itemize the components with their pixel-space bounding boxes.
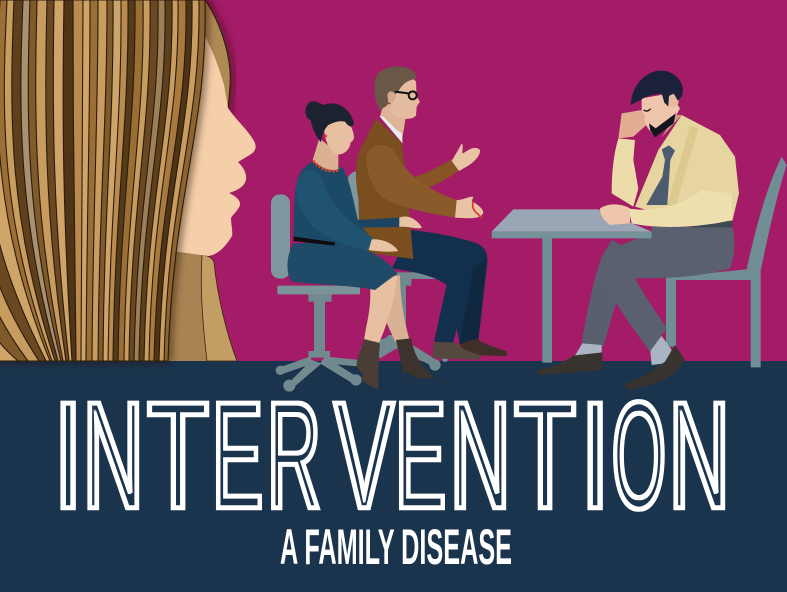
title: T — [514, 371, 576, 541]
neck hair — [160, 245, 237, 361]
man's trousers — [392, 230, 487, 344]
shirt torso — [635, 115, 739, 223]
title: O — [612, 371, 666, 541]
woman's neck and head — [305, 101, 354, 171]
table — [492, 209, 652, 363]
woman's torso — [293, 162, 373, 245]
shirt shading — [668, 125, 698, 207]
man's far leg shade — [459, 258, 487, 344]
title: T — [147, 371, 209, 541]
belt — [693, 221, 732, 227]
wooden chair — [666, 157, 787, 367]
woman and man seated on the left — [271, 66, 507, 392]
man's office chair — [346, 171, 448, 371]
raised arm — [612, 138, 638, 207]
title: R — [267, 372, 321, 541]
title: I — [53, 370, 83, 540]
near shoe — [624, 345, 685, 389]
man's far arm — [407, 159, 459, 195]
woman's near sleeve — [296, 169, 373, 250]
woman's office chair — [271, 194, 362, 392]
woman's far hand — [399, 217, 422, 228]
resting arm — [628, 190, 732, 227]
raised forearm hand — [618, 110, 648, 138]
man's jacket — [356, 118, 413, 259]
title: N — [83, 372, 144, 541]
trousers — [602, 227, 734, 352]
woman's near hand — [369, 239, 398, 252]
near sock — [650, 336, 672, 365]
woman's far arm — [340, 183, 399, 228]
tie — [646, 145, 675, 205]
man's shoes — [433, 338, 507, 360]
head — [631, 71, 683, 137]
front neck strand — [201, 255, 237, 361]
back hair band — [190, 0, 230, 140]
title: N — [450, 372, 511, 541]
woman's belt — [293, 237, 335, 246]
title: N — [669, 372, 730, 541]
subtitle: A FAMILY DISEASE — [280, 519, 512, 575]
woman's boots — [357, 338, 437, 389]
far leg — [582, 240, 652, 347]
title: I — [580, 370, 610, 540]
far sock — [573, 343, 602, 358]
navy floor panel — [0, 361, 787, 592]
resting hands — [600, 204, 630, 225]
title — [53, 370, 730, 541]
face profile — [165, 15, 256, 256]
woman in profile with long hair — [0, 0, 256, 361]
man's head — [374, 66, 420, 119]
man's raised hand — [452, 143, 480, 171]
title: E — [212, 370, 263, 541]
woman's skirt — [287, 242, 397, 290]
far shoe — [537, 352, 602, 375]
title: E — [395, 370, 446, 541]
woman's legs — [364, 275, 410, 342]
hair strands — [0, 0, 205, 361]
title: V — [334, 371, 394, 541]
man's near hand with bracelet — [455, 197, 483, 218]
dejected man at table — [492, 71, 787, 389]
man's neck and collar — [379, 102, 407, 143]
magenta background — [0, 0, 787, 362]
man's near sleeve — [366, 145, 457, 218]
